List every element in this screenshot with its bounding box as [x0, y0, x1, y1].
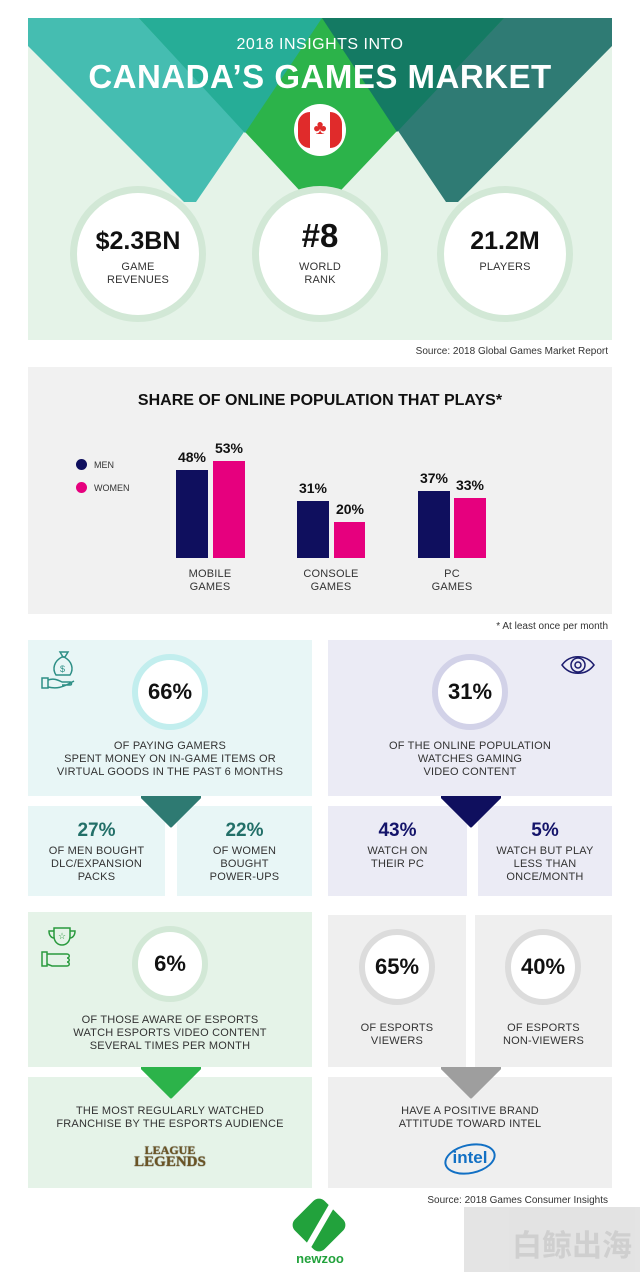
stat: world rank: [252, 186, 388, 322]
logo: intel: [441, 1139, 499, 1179]
chart title: SHARE OF ONLINE POPULATION THAT PLAYS*: [138, 392, 502, 409]
source 2: Source: 2018 Games Consumer Insights: [427, 1195, 608, 1206]
legend: WOMEN: [94, 483, 130, 493]
text: [56, 1105, 284, 1130]
bar chart: GAMES: [432, 581, 472, 593]
logo: league of legends: [134, 1143, 206, 1170]
panel: watching: [328, 640, 612, 896]
sub stat 22%: BOUGHT: [220, 858, 269, 870]
bar chart: GAMES: [190, 581, 230, 593]
logo: league of legends: LEAGUE: [145, 1143, 195, 1157]
arrow: [141, 1067, 201, 1099]
arrow: [441, 796, 501, 828]
sub stat 5%: 5%: [531, 820, 559, 841]
sub stat 27%: [49, 820, 144, 883]
sub stat 22%: 22%: [225, 820, 264, 841]
panel: intel brand: [328, 915, 612, 1188]
panel: intel brand: HAVE A POSITIVE BRAND: [401, 1105, 539, 1117]
panel: intel brand: OF ESPORTS: [361, 1022, 433, 1034]
text: OF PAYING GAMERS: [114, 740, 226, 752]
panel: watching: WATCHES GAMING: [418, 753, 522, 765]
logo: newzoo: [292, 1198, 346, 1266]
bar chart: [176, 440, 486, 593]
text: FRANCHISE BY THE ESPORTS AUDIENCE: [56, 1118, 284, 1130]
text: THE MOST REGULARLY WATCHED: [76, 1105, 264, 1117]
stat: revenues: REVENUES: [107, 274, 169, 286]
source 1: Source: 2018 Global Games Market Report: [416, 346, 608, 357]
stat: revenues: GAME: [121, 261, 155, 273]
legend: [76, 459, 130, 493]
sub stat 27%: DLC/EXPANSION: [51, 858, 142, 870]
stat circle 66%: 66%: [148, 679, 192, 704]
stat circle 40%: 40%: [521, 954, 565, 979]
legend: MEN: [94, 460, 114, 470]
text: VIRTUAL GOODS IN THE PAST 6 MONTHS: [57, 766, 283, 778]
bar chart: 33%: [456, 477, 484, 493]
sub stat 27%: PACKS: [78, 871, 115, 883]
panel: esports viewing: WATCH ESPORTS VIDEO CONTENT: [73, 1027, 267, 1039]
sub stat 43%: [367, 820, 428, 870]
bar chart: 53%: [215, 440, 243, 456]
sub stat 27%: 27%: [77, 820, 116, 841]
stat: players: [437, 186, 573, 322]
sub stat 5%: [496, 820, 594, 883]
arrow: [441, 1067, 501, 1098]
stat: world rank: RANK: [304, 274, 336, 286]
footnote: * At least once per month: [496, 621, 608, 632]
stat circle 6%: [132, 926, 208, 1002]
text: SPENT MONEY ON IN-GAME ITEMS OR: [64, 753, 276, 765]
icon: eye: [561, 656, 595, 674]
sub stat 5%: LESS THAN: [514, 858, 576, 870]
panel: intel brand: intel: [453, 1148, 487, 1167]
watermark: 白鲸出海: [512, 1230, 632, 1263]
panel: intel brand: NON-VIEWERS: [503, 1035, 584, 1047]
watermark: [464, 1207, 640, 1272]
icon: trophy in hand: ☆: [58, 931, 66, 941]
stat: world rank: #8: [302, 217, 338, 254]
stat: world rank: WORLD: [299, 261, 341, 273]
stat circle 65%: [359, 929, 435, 1005]
sub stat 43%: THEIR PC: [371, 858, 424, 870]
bar chart: 48%: [178, 449, 206, 465]
text: [57, 740, 283, 778]
icon: money bag in hand: [41, 651, 74, 689]
panel: watching: OF THE ONLINE POPULATION: [389, 740, 551, 752]
header graphic: overlapping chevrons: [28, 18, 612, 202]
bar chart: GAMES: [311, 581, 351, 593]
sub stat 27%: OF MEN BOUGHT: [49, 845, 144, 857]
bar chart: MOBILE: [189, 568, 231, 580]
stat: players: 21.2M: [470, 227, 540, 255]
logo: newzoo: newzoo: [296, 1251, 344, 1266]
panel: esports viewing: OF THOSE AWARE OF ESPORTS: [82, 1014, 258, 1026]
stat circle 65%: 65%: [375, 954, 419, 979]
sub stat 43%: WATCH ON: [367, 845, 428, 857]
icon: trophy in hand: [41, 927, 76, 967]
subtitle: 2018 INSIGHTS INTO: [236, 36, 403, 53]
bar chart: CONSOLE: [303, 568, 359, 580]
sub stat 43%: 43%: [378, 820, 417, 841]
icon: money bag in hand: $: [60, 664, 65, 674]
title: CANADA’S GAMES MARKET: [88, 58, 552, 95]
bar chart: 31%: [299, 480, 327, 496]
sub stat 22%: POWER-UPS: [210, 871, 279, 883]
icon: canada flag: [294, 104, 346, 156]
icon: canada flag: ♣: [313, 117, 327, 139]
stat: revenues: [70, 186, 206, 322]
stat circle 40%: [505, 929, 581, 1005]
panel: header: [28, 18, 612, 340]
sub stat 5%: WATCH BUT PLAY: [496, 845, 594, 857]
sub stat 22%: OF WOMEN: [213, 845, 276, 857]
panel: intel brand: ATTITUDE TOWARD INTEL: [399, 1118, 541, 1130]
panel: esports viewing: SEVERAL TIMES PER MONTH: [90, 1040, 250, 1052]
sub stat 22%: [210, 820, 279, 883]
panel: spending: [28, 640, 312, 896]
panel: watching: VIDEO CONTENT: [423, 766, 517, 778]
bar chart: 20%: [336, 501, 364, 517]
stat circle 66%: [132, 654, 208, 730]
stat: revenues: $2.3BN: [96, 227, 180, 255]
stat: players: PLAYERS: [479, 261, 531, 273]
panel: esports viewing: [28, 912, 312, 1188]
stat circle 31%: 31%: [448, 679, 492, 704]
arrow: [141, 796, 201, 828]
bar chart: PC: [444, 568, 460, 580]
panel: intel brand: VIEWERS: [371, 1035, 423, 1047]
panel: intel brand: OF ESPORTS: [507, 1022, 580, 1034]
bar chart: 37%: [420, 470, 448, 486]
stat circle 6%: 6%: [154, 951, 186, 976]
logo: league of legends: LEGENDS: [134, 1154, 206, 1170]
stat circle 31%: [432, 654, 508, 730]
sub stat 5%: ONCE/MONTH: [506, 871, 584, 883]
panel: share of online population: [28, 367, 612, 614]
